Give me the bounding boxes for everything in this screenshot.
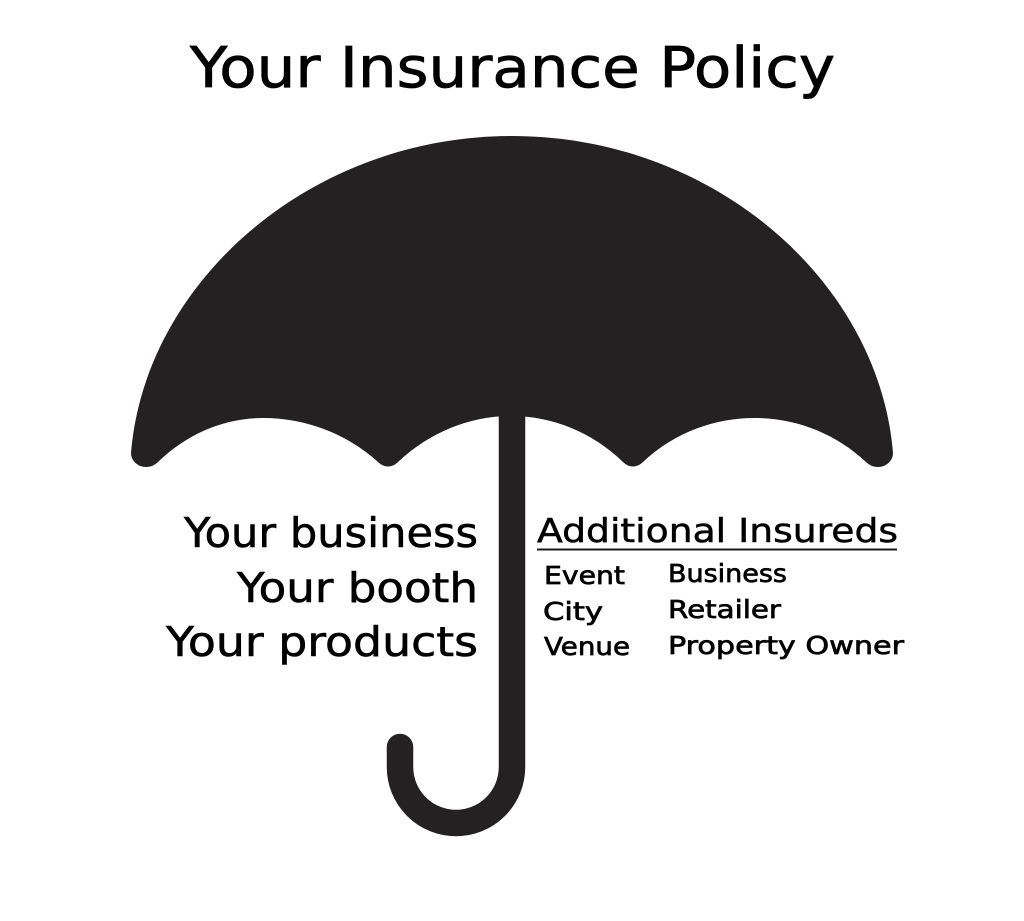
text block: your coverage: Your products [165, 618, 478, 666]
icon: umbrella [131, 136, 893, 823]
list: additional insureds right column [668, 559, 905, 660]
list: additional insureds left column: Venue [544, 632, 630, 661]
list: additional insureds right column: Property Owner [668, 631, 905, 660]
list: additional insureds right column: Business [668, 559, 787, 588]
text block: your coverage: Your business [183, 509, 478, 557]
list: additional insureds left column: City [543, 597, 603, 626]
heading: additional insureds: Additional Insureds [537, 511, 898, 550]
text block: your coverage [165, 509, 478, 666]
text block: your coverage: Your booth [236, 564, 478, 612]
title: Your Insurance Policy [189, 36, 835, 101]
list: additional insureds left column [543, 561, 630, 661]
list: additional insureds left column: Event [544, 561, 625, 590]
umbrella canopy [131, 136, 893, 467]
umbrella handle [400, 415, 512, 823]
list: additional insureds right column: Retailer [668, 595, 782, 624]
